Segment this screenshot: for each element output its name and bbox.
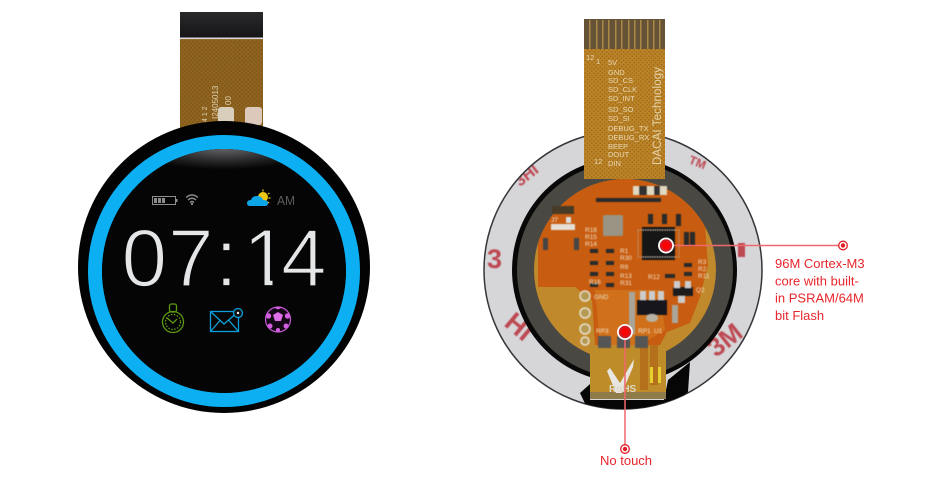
pin labels: DOUT (608, 150, 630, 159)
pin labels: BEEP (608, 142, 628, 151)
bottom lens cut (580, 362, 690, 414)
3M adhesive marks: 3HI (512, 161, 542, 190)
outer ring edge (484, 131, 762, 409)
component labels: Q2 (696, 287, 705, 294)
pin labels: 5V (608, 58, 617, 67)
callout: touch (600, 324, 652, 468)
panel: front of display (78, 12, 370, 413)
component labels: R18 (585, 227, 597, 234)
component labels: R1 (620, 248, 629, 255)
component labels (585, 227, 710, 335)
pin labels: 1 (596, 57, 600, 66)
front flex cable: 00 (224, 96, 233, 105)
component labels: RP1 (638, 328, 651, 335)
icon: envelope (210, 308, 242, 332)
crystal (603, 215, 623, 236)
3M adhesive marks: 3 (487, 244, 502, 274)
callout text: in PSRAM/64M (775, 290, 864, 306)
pin labels: GND (608, 68, 625, 77)
rear flex cable (584, 19, 665, 179)
black lens ring (512, 158, 737, 382)
callout text: core with built- (775, 274, 859, 288)
brand text: DACAI Technology (652, 67, 664, 165)
flexible circuit board (534, 172, 716, 399)
callout text: bit Flash (775, 308, 824, 323)
component labels: R12 (648, 274, 660, 281)
front flex cable: I2405013 (211, 85, 220, 119)
pin labels: DIN (608, 159, 621, 168)
component labels: R11 (698, 273, 710, 280)
via pads (580, 291, 590, 345)
resistor block (590, 214, 695, 287)
icon: weather (247, 190, 270, 206)
PCB components (543, 186, 710, 348)
anchor on board (617, 324, 633, 340)
component labels: R16 (589, 279, 601, 286)
3M adhesive marks: 3M (701, 317, 748, 363)
transistor (673, 281, 693, 303)
AM label: AM (277, 193, 295, 208)
display bezel (78, 121, 370, 413)
time: 07:14 (122, 213, 327, 304)
component labels: R3 (698, 259, 707, 266)
pin labels: DEBUG_RX (608, 133, 649, 142)
resistor packs (598, 336, 648, 348)
pin labels (586, 53, 649, 168)
icon: battery (152, 196, 178, 204)
callout text: 96M Cortex-M3 (775, 256, 865, 271)
RoHS mark: RoHS (609, 384, 637, 395)
icon: soccer ball (266, 306, 290, 332)
blue ring (95, 142, 353, 400)
orange copper region (538, 172, 708, 345)
anchor on chip (658, 238, 674, 254)
end marker (621, 445, 629, 453)
callout text: No touch (600, 453, 652, 468)
icon: wifi (186, 195, 198, 204)
pin labels: 12 (594, 157, 602, 166)
adhesive ring (484, 131, 762, 409)
screen (102, 149, 346, 393)
pin labels: SD_CLK (608, 85, 637, 94)
component labels: U1 (654, 328, 663, 335)
regulator chip (637, 291, 667, 322)
component labels: GND (594, 294, 609, 301)
front flex cable: 4 1 2 (202, 106, 209, 122)
component labels: R15 (585, 234, 597, 241)
component labels: R2 (698, 266, 707, 273)
board tail (590, 348, 666, 398)
component labels: R14 (585, 241, 597, 248)
component labels: R6 (620, 264, 629, 271)
pin labels: SD_SI (608, 114, 630, 123)
screen gloss (158, 149, 290, 168)
pin labels: 12 (586, 53, 594, 62)
leader line (624, 332, 626, 449)
panel: back of display (484, 19, 762, 414)
status bar (152, 190, 295, 208)
icon: stopwatch (162, 304, 184, 332)
component labels: R31 (620, 280, 632, 287)
component labels: RP3 (596, 328, 609, 335)
3M adhesive marks (487, 153, 748, 363)
pin labels: SD_CS (608, 76, 633, 85)
component labels: R30 (620, 255, 632, 262)
grey display back (517, 162, 733, 378)
callout: processor (658, 238, 868, 323)
pin labels: SD_SO (608, 105, 634, 114)
end marker (839, 241, 847, 250)
front flex cable (180, 12, 263, 128)
pin labels: SD_INT (608, 94, 635, 103)
pin labels: DEBUG_TX (608, 124, 648, 133)
fuse and connector parts: J7 (551, 217, 558, 224)
leader line (666, 244, 843, 246)
fuse and connector parts (543, 186, 667, 250)
component labels: R13 (620, 273, 632, 280)
capacitors (629, 292, 678, 334)
3M adhesive marks: TM (687, 153, 708, 172)
main controller chip (642, 227, 675, 260)
RoHS mark (607, 359, 637, 395)
3M adhesive marks: HI (499, 307, 539, 347)
